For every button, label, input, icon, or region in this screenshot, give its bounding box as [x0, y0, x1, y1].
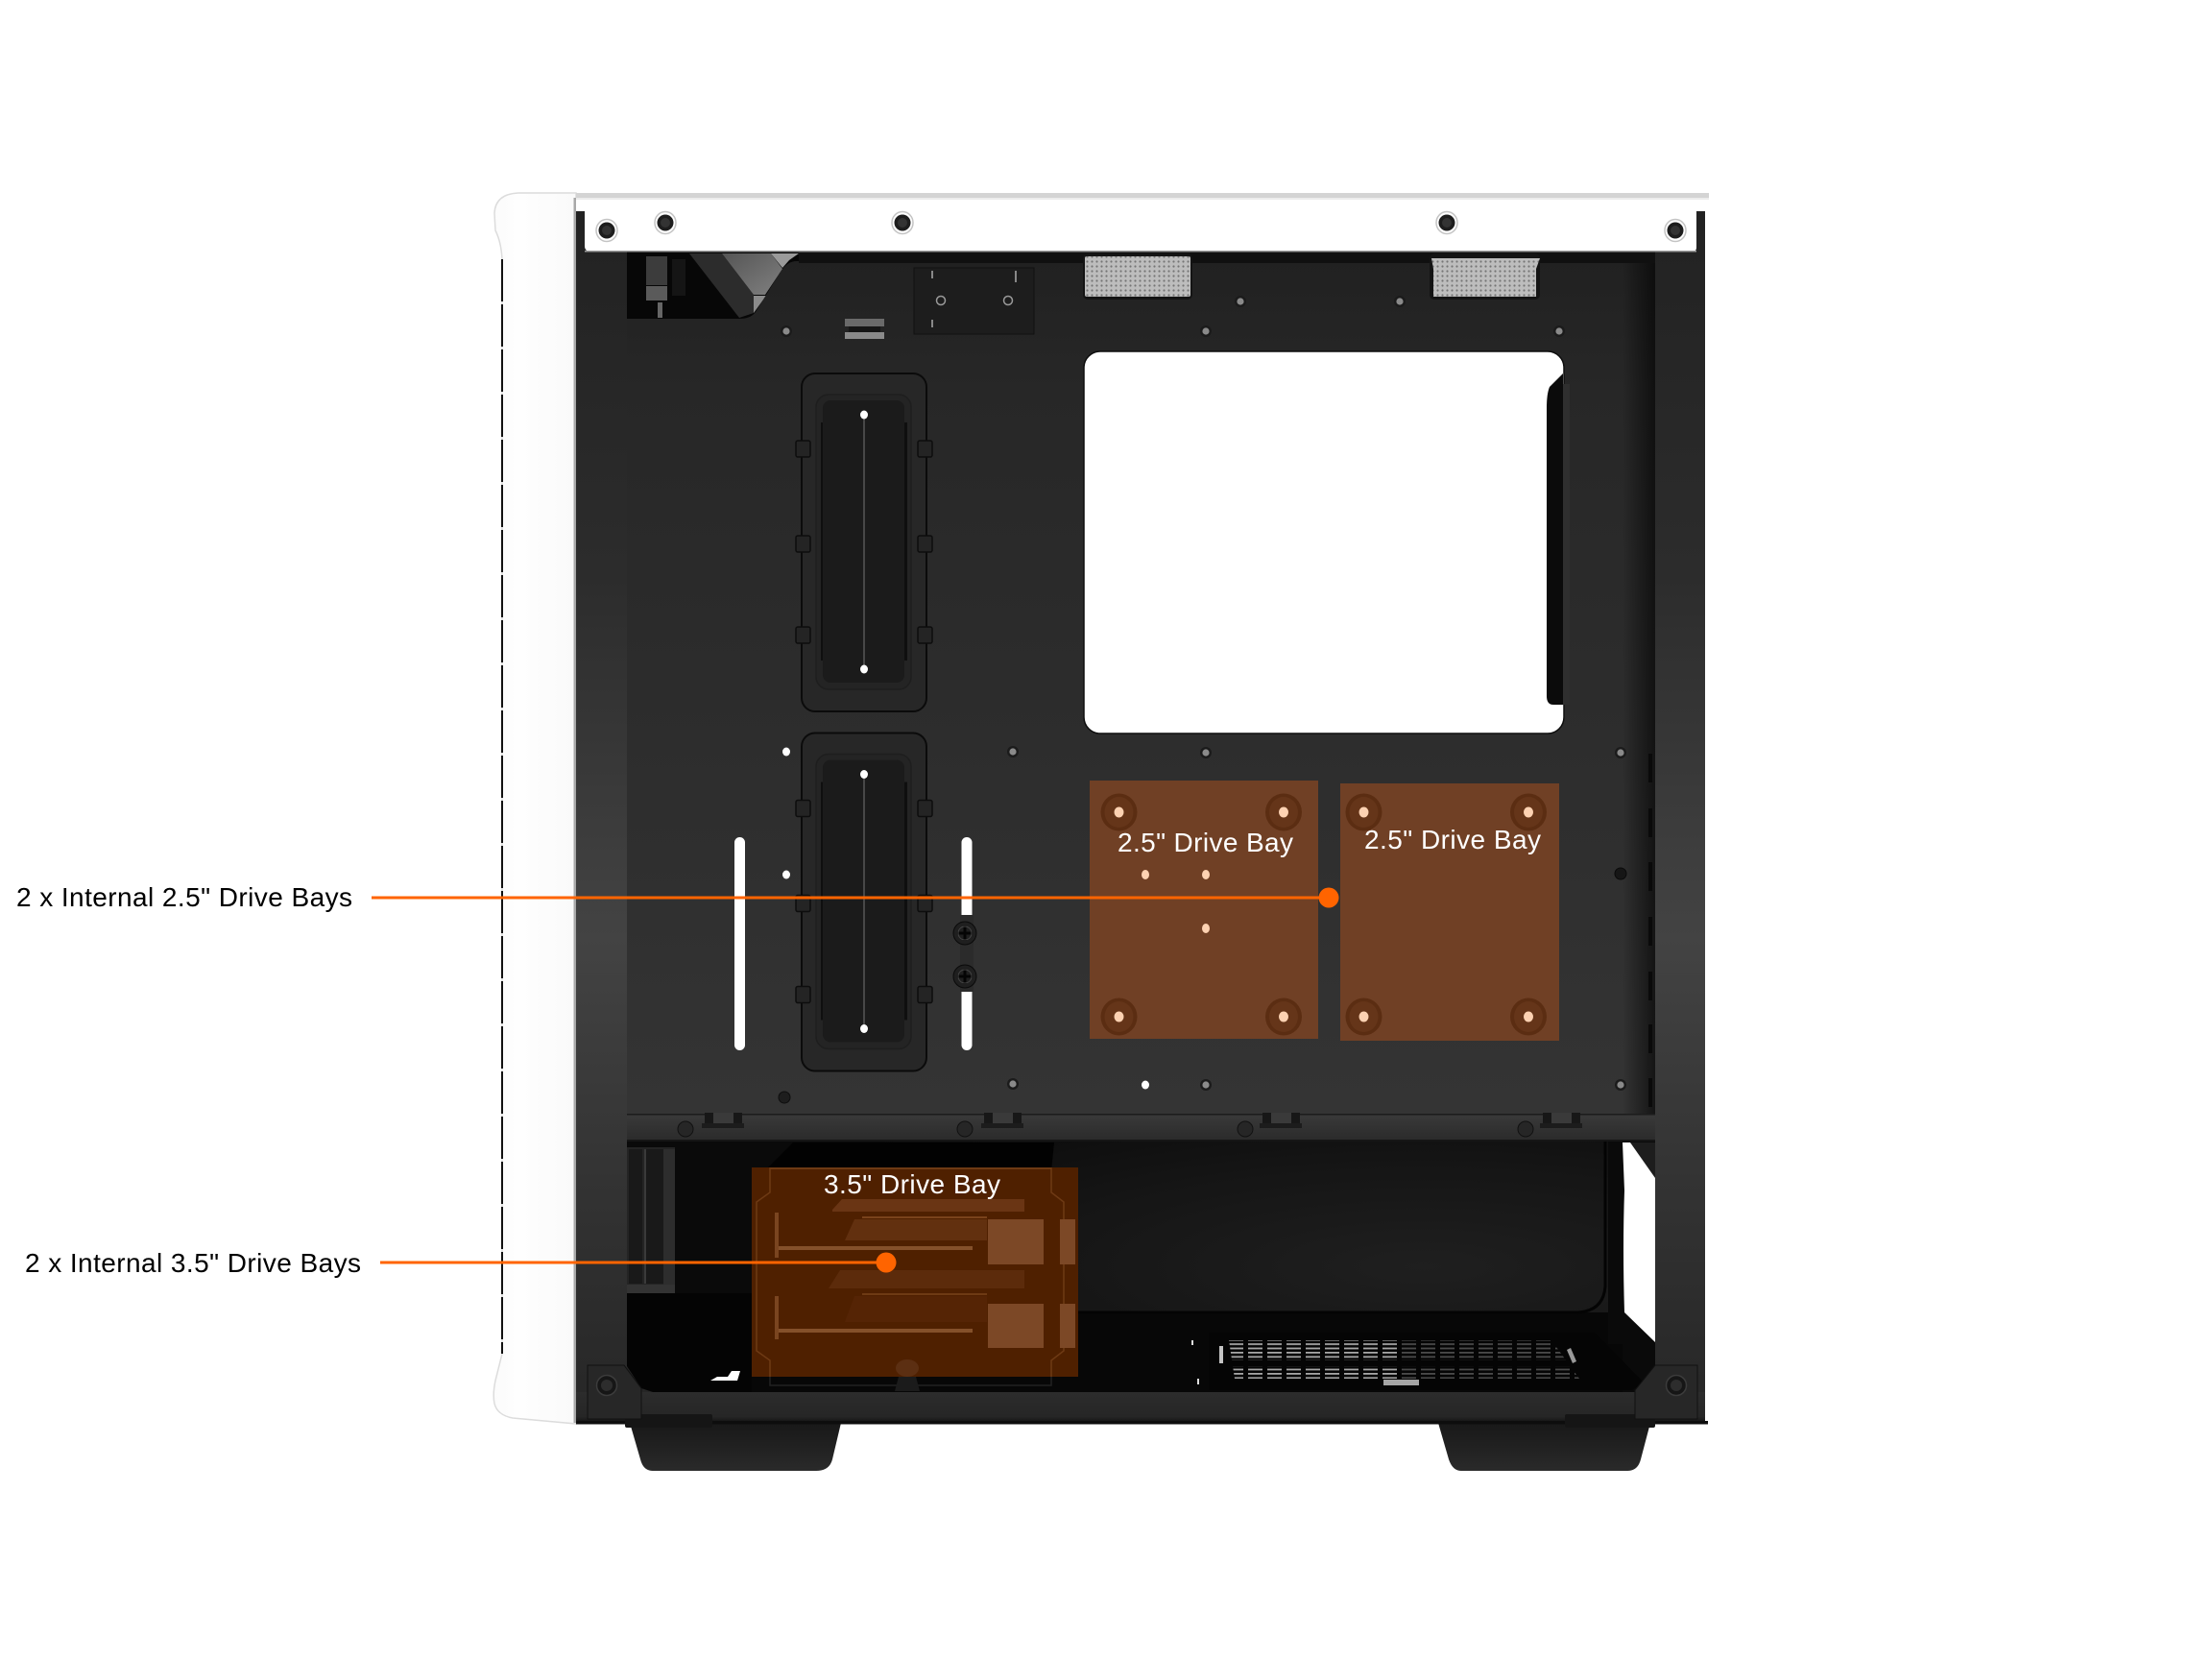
upper cable grommet — [796, 373, 932, 711]
perforated mesh vents — [1083, 253, 1540, 300]
window upper brace — [1630, 1142, 1655, 1178]
window inner strut — [1608, 1142, 1623, 1344]
left foot mount — [625, 1414, 712, 1428]
right tie-down slot with screws — [953, 837, 976, 1050]
rear wall back fill — [576, 211, 1705, 1423]
drive end plates — [988, 1219, 1075, 1348]
dark upper wedge — [752, 1142, 1054, 1184]
label: right 2.5 inch bay: 2.5" Drive Bay — [1364, 825, 1541, 854]
shroud bar — [627, 1113, 1655, 1142]
computer case side view — [493, 193, 1709, 1471]
top rail screws — [596, 211, 1686, 242]
black lower-left void — [627, 1293, 752, 1392]
lower cable grommet — [796, 733, 932, 1071]
callout dot: 2.5 inch — [1319, 887, 1338, 908]
basement chamber — [627, 1142, 1623, 1392]
small white floor cutout — [710, 1371, 740, 1381]
bottom lip — [576, 1421, 1708, 1425]
floor corner curve — [627, 1366, 653, 1392]
dark tray holes — [779, 868, 1626, 1103]
panel: right 2.5 inch drive bay — [1340, 783, 1559, 1041]
PSU floor vent — [1191, 1333, 1644, 1390]
callout: 2.5 inch drive bays — [16, 882, 1338, 912]
drive slabs — [829, 1199, 1024, 1322]
drive rails — [775, 1213, 973, 1339]
left bottom corner piece — [588, 1365, 641, 1419]
left tie-down slot — [734, 837, 745, 1050]
tray upper small pins — [781, 296, 1626, 1091]
white CPU cutout — [1084, 351, 1564, 733]
callout line: 2.5 inch — [372, 897, 1329, 899]
main tray panel — [627, 261, 1655, 1114]
right frame pillar — [1655, 211, 1705, 1423]
panel: left 2.5 inch drive bay — [1090, 781, 1318, 1039]
left foot — [630, 1423, 841, 1471]
white front panel — [493, 193, 576, 1424]
callout line: 3.5 inch — [380, 1262, 886, 1263]
bottom frame rail — [576, 1392, 1705, 1423]
fan bracket strips — [627, 1147, 675, 1293]
right tray shadow — [1623, 263, 1655, 1114]
upper left cable notch — [627, 252, 800, 321]
callout text: 2.5 inch: 2 x Internal 2.5" Drive Bays — [16, 882, 352, 912]
rear fan edge — [1547, 373, 1570, 705]
callout dot: 3.5 inch — [876, 1252, 897, 1273]
right bottom corner piece — [1635, 1365, 1697, 1419]
label: 3.5 inch bay: 3.5" Drive Bay — [824, 1169, 1000, 1199]
label: left 2.5 inch bay: 2.5" Drive Bay — [1118, 828, 1293, 857]
right foot mount — [1565, 1414, 1655, 1428]
left frame pillar — [576, 211, 627, 1423]
right edge tray slots — [1648, 754, 1652, 1107]
panel: 3.5 inch drive bay cage — [752, 1167, 1078, 1391]
cage centre screw — [895, 1359, 920, 1391]
cage outline below tint — [770, 1377, 1051, 1385]
white pin holes — [782, 747, 1149, 1089]
top shadow band — [799, 252, 1655, 263]
cable clip — [845, 319, 884, 339]
motherboard standoff bracket — [914, 268, 1034, 334]
right side window — [1623, 1142, 1655, 1342]
hidden fan void — [675, 1144, 761, 1327]
callout: 3.5 inch drive bays — [25, 1248, 897, 1278]
right foot — [1438, 1423, 1650, 1471]
callout text: 3.5 inch: 2 x Internal 3.5" Drive Bays — [25, 1248, 361, 1278]
white top rail — [576, 193, 1709, 252]
